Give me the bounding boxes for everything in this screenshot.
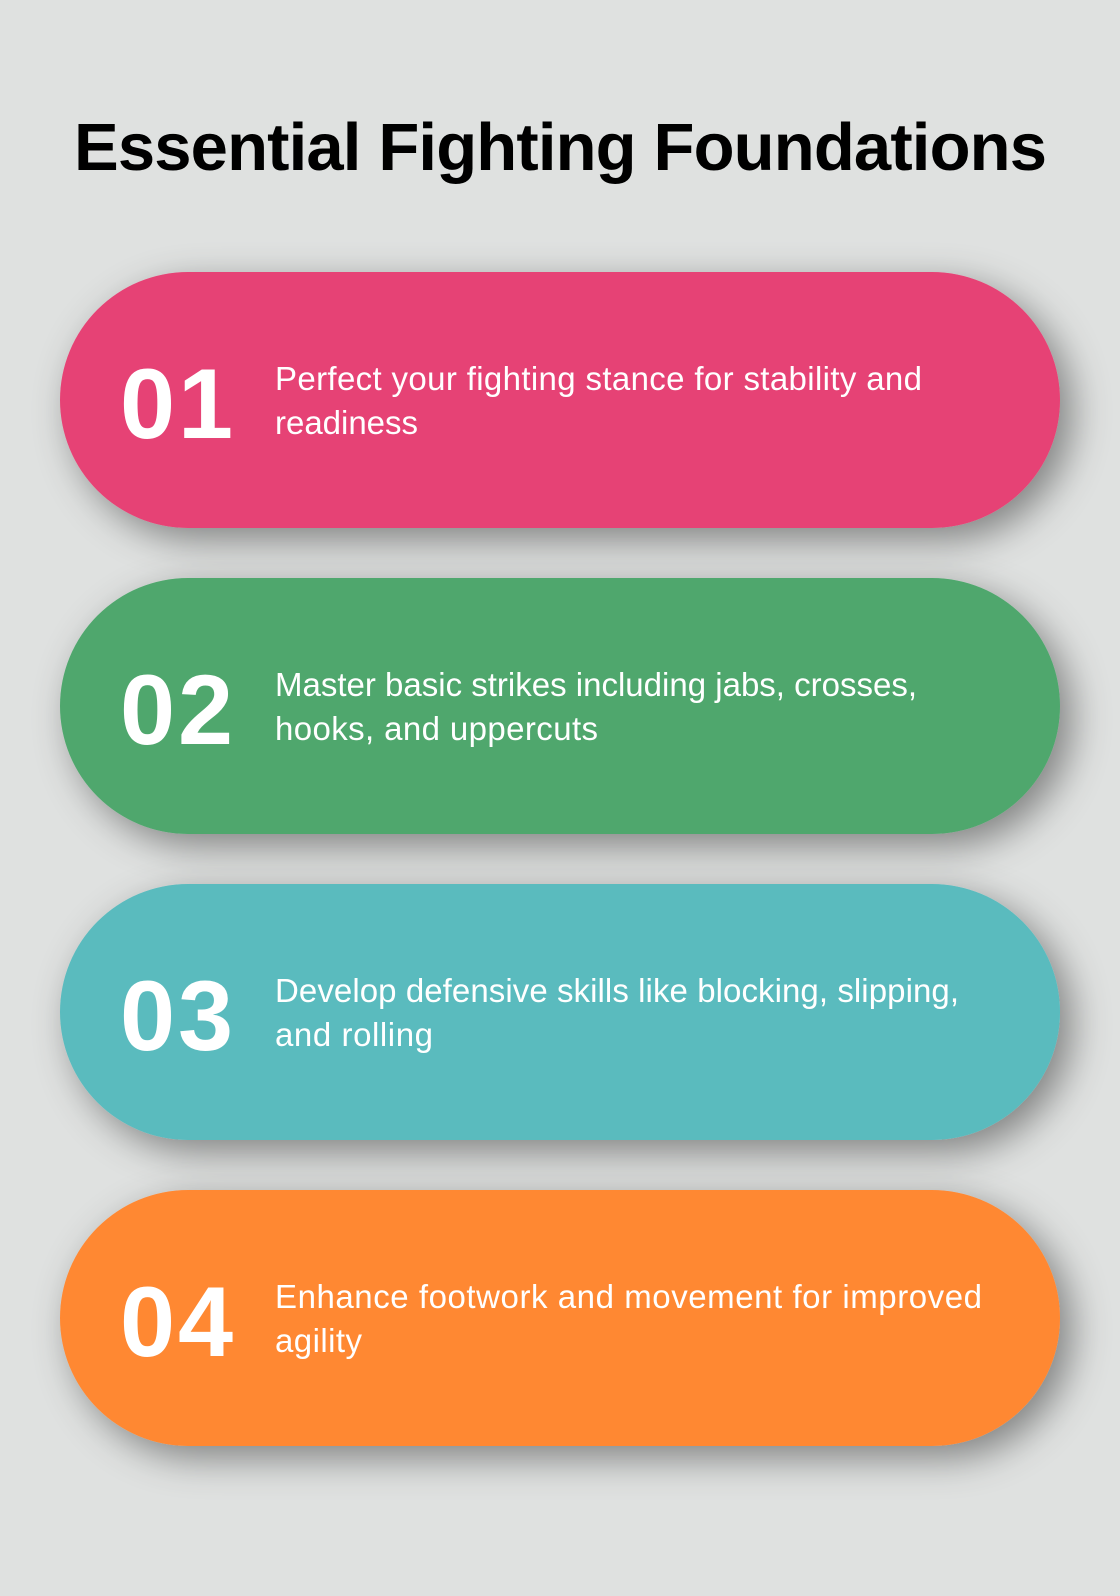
text: step 04 description: Enhance footwork and movement for improved [275, 1278, 982, 1315]
text: step 01 description: Perfect your fighting stance for stability and [275, 360, 922, 397]
text: step 03 description: Develop defensive skills like blocking, slipping, [275, 972, 959, 1009]
text: step 01 description: readiness [275, 404, 418, 441]
number 02: 02 [120, 654, 233, 765]
pill: step 04 background [60, 1190, 1060, 1446]
text: step 02 description: Master basic strikes including jabs, crosses, [275, 666, 917, 703]
pill: step 01 background [60, 272, 1060, 528]
panel: step 03 [60, 884, 1060, 1140]
panel: step 02 [60, 578, 1060, 834]
panel: step 01 [60, 272, 1060, 528]
text: step 03 description: and rolling [275, 1016, 433, 1053]
text: step 04 description: agility [275, 1322, 362, 1359]
pill: step 03 background [60, 884, 1060, 1140]
number 01: 01 [120, 348, 233, 459]
text: step 02 description: hooks, and uppercuts [275, 710, 598, 747]
number 04: 04 [120, 1266, 233, 1377]
number 03: 03 [120, 960, 233, 1071]
pill: step 02 background [60, 578, 1060, 834]
title: Essential Fighting Foundations [74, 110, 1047, 185]
panel: step 04 [60, 1190, 1060, 1446]
